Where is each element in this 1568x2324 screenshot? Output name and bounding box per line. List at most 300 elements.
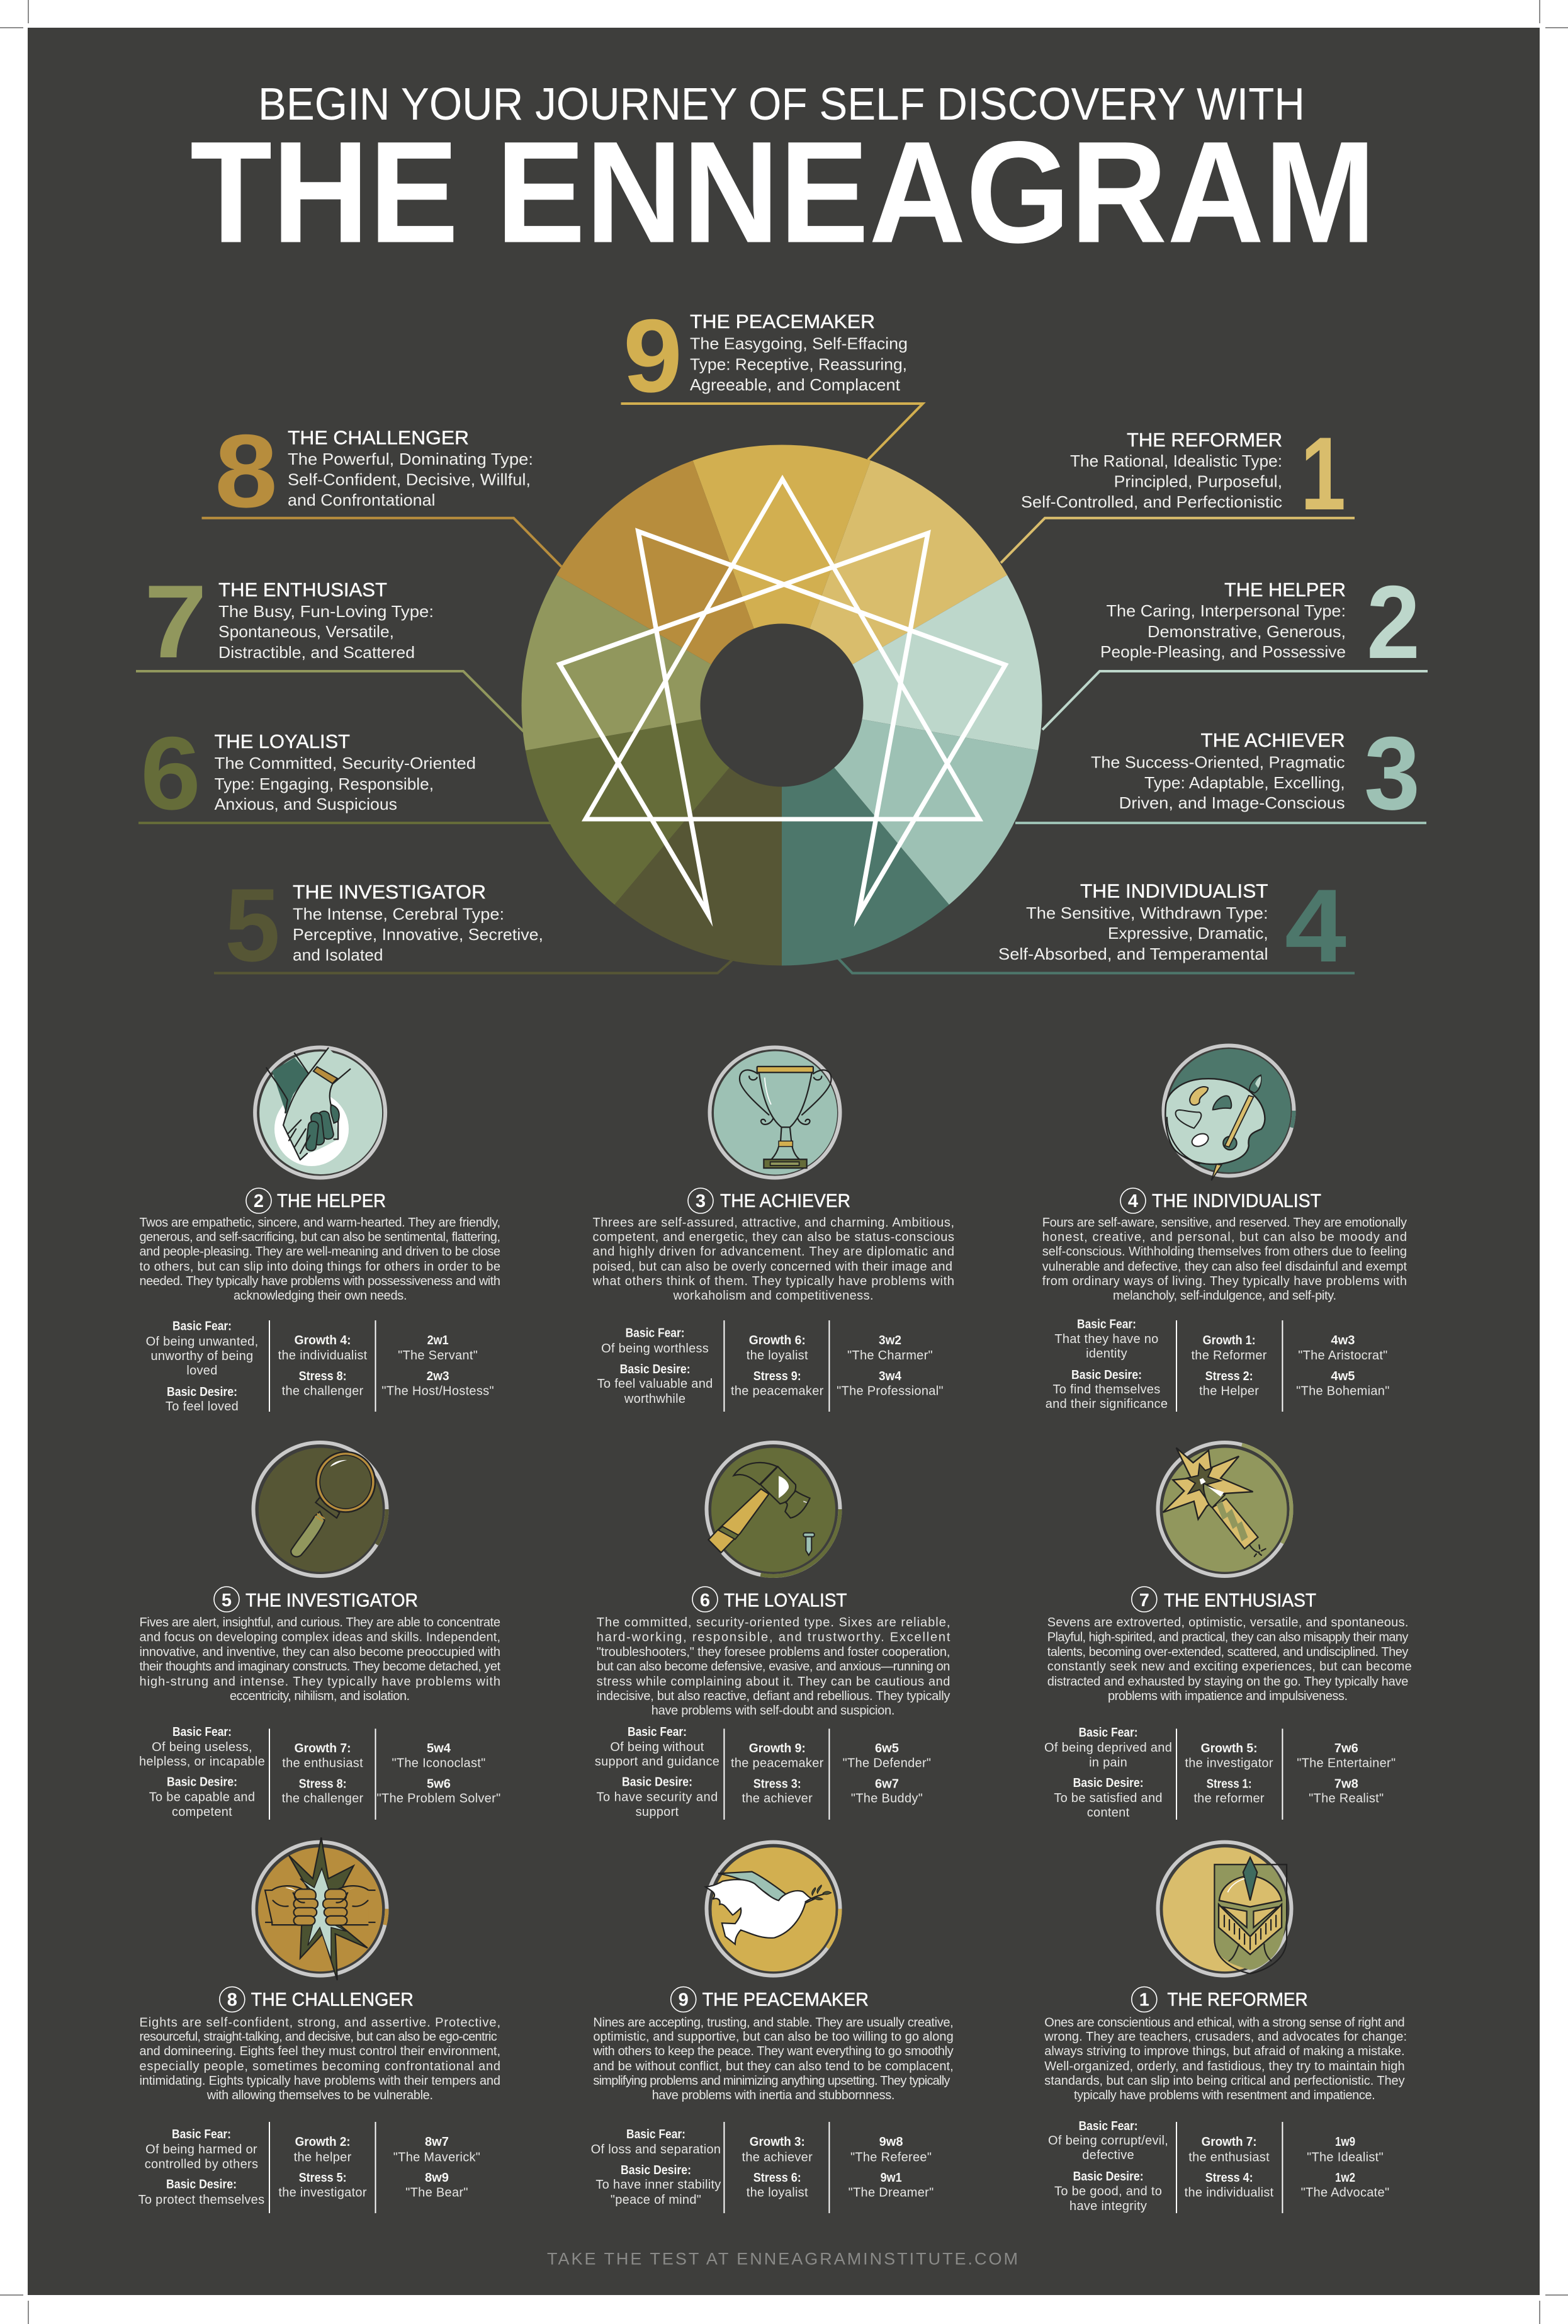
label: type 5: and Isolated [293, 946, 383, 965]
description: stress while complaining about it. They can be cautious and [597, 1675, 950, 1689]
table: fear, desire, growth, stress, wings: Basic Desire: [1073, 1776, 1144, 1790]
table: fear, desire, growth, stress, wings: Of being harmed or [145, 2143, 257, 2157]
table: fear, desire, growth, stress, wings: Basic Desire: [1073, 2170, 1144, 2184]
description: honest, creative, and personal, but can also be moody and [1042, 1230, 1407, 1244]
description: but can also become defensive, evasive, and anxious—running on [597, 1660, 950, 1674]
label: type 3: 3 [1364, 715, 1420, 831]
label: type 1 [1021, 416, 1346, 531]
table: fear, desire, growth, stress, wings: the achiever [742, 2151, 813, 2165]
table: fear, desire, growth, stress, wings: the challenger [282, 1384, 364, 1398]
table: fear, desire, growth, stress, wings: worthwhile [624, 1392, 685, 1406]
table: fear, desire, growth, stress, wings [138, 2122, 480, 2213]
description: and be without conflict, but they can also tend to be complacent, [593, 2060, 954, 2073]
heading: 9 the peacemaker: THE PEACEMAKER [702, 1990, 869, 2010]
label: type 1: THE REFORMER [1127, 429, 1282, 451]
table: fear, desire, growth, stress, wings: "The Host/Hostess" [381, 1384, 494, 1398]
description: optimistic, and supportive, but can also be too willing to go along [593, 2030, 954, 2044]
table: fear, desire, growth, stress, wings: "The Professional" [837, 1384, 944, 1398]
table: fear, desire, growth, stress, wings: the loyalist [747, 2186, 808, 2200]
description [140, 1616, 500, 1703]
description: resourceful, straight-talking, and decisive, but can also be ego-centric [140, 2030, 497, 2044]
table: fear, desire, growth, stress, wings: and their significance [1046, 1397, 1168, 1411]
table: fear, desire, growth, stress, wings: the peacemaker [731, 1757, 824, 1771]
label: type 6: THE LOYALIST [215, 730, 350, 752]
label: type 3: Type: Adaptable, Excelling, [1144, 773, 1345, 792]
table: fear, desire, growth, stress, wings: 4w5 [1331, 1369, 1355, 1383]
label: type 7: 7 [144, 564, 207, 679]
table: fear, desire, growth, stress, wings: Basic Fear: [172, 1725, 232, 1739]
table: fear, desire, growth, stress, wings: the individualist [1185, 2186, 1274, 2200]
table: fear, desire, growth, stress, wings: "The Iconoclast" [392, 1757, 486, 1771]
heading: 6 the loyalist: 6 [700, 1590, 710, 1611]
table: fear, desire, growth, stress, wings: To feel valuable and [597, 1377, 713, 1391]
heading: 1 the reformer [1132, 1987, 1308, 2012]
label: type 8: Self-Confident, Decisive, Willful, [288, 470, 531, 489]
table: fear, desire, growth, stress, wings: the challenger [282, 1792, 364, 1806]
label: type 8: and Confrontational [288, 490, 436, 509]
description: Twos are empathetic, sincere, and warm-hearted. They are friendly, [140, 1216, 500, 1230]
label: type 8: 8 [215, 413, 278, 529]
label: type 3: THE ACHIEVER [1201, 729, 1345, 751]
panel: the helper [140, 1048, 500, 1414]
description: typically have problems with resentment and impatience. [1074, 2089, 1375, 2102]
table: fear, desire, growth, stress, wings [597, 1320, 944, 1412]
table: fear, desire, growth, stress, wings: support [636, 1805, 679, 1819]
table: fear, desire, growth, stress, wings: Growth 5: [1201, 1742, 1258, 1755]
table: fear, desire, growth, stress, wings: "The Charmer" [847, 1349, 933, 1363]
table: fear, desire, growth, stress, wings: the investigator [278, 2186, 367, 2200]
label: type 8 [215, 413, 533, 529]
description: "troubleshooters," they foresee problems and foster cooperation, [597, 1645, 950, 1659]
icon: firework rocket [1158, 1443, 1292, 1576]
table: fear, desire, growth, stress, wings: Stress 8: [299, 1777, 347, 1791]
heading: 6 the loyalist [692, 1587, 847, 1612]
description: and people-pleasing. They are well-meaning and driven to be close [140, 1245, 500, 1259]
table: fear, desire, growth, stress, wings [139, 1725, 500, 1820]
label: type 6: Anxious, and Suspicious [215, 795, 397, 813]
table: fear, desire, growth, stress, wings: "The Defender" [843, 1757, 931, 1771]
title: begin your journey: BEGIN YOUR JOURNEY OF SELF DISCOVERY WITH [258, 79, 1305, 130]
table: fear, desire, growth, stress, wings: That they have no [1054, 1332, 1159, 1346]
panel: the loyalist [595, 1443, 950, 1820]
description: hard-working, responsible, and trustworthy. Excellent [597, 1631, 950, 1645]
table: fear, desire, growth, stress, wings: Basic Fear: [1077, 1317, 1136, 1331]
table: fear, desire, growth, stress, wings: Of being useless, [152, 1740, 252, 1754]
description [140, 1216, 500, 1303]
table: fear, desire, growth, stress, wings: loved [186, 1364, 218, 1378]
label: type 7: Distractible, and Scattered [218, 643, 415, 662]
description: Threes are self-assured, attractive, and charming. Ambitious, [593, 1216, 954, 1230]
label: type 4: 4 [1285, 868, 1346, 983]
table: fear, desire, growth, stress, wings: 2w1 [427, 1334, 449, 1347]
label: type 1: 1 [1300, 416, 1346, 531]
description: vulnerable and defective, they can also feel disdainful and exempt [1042, 1260, 1407, 1274]
label: type 2: Demonstrative, Generous, [1148, 622, 1346, 641]
label: type 2: People-Pleasing, and Possessive [1100, 642, 1346, 661]
table: fear, desire, growth, stress, wings: the achiever [742, 1792, 813, 1806]
heading: 8 the challenger: THE CHALLENGER [251, 1990, 414, 2010]
heading: 4 the individualist: THE INDIVIDUALIST [1152, 1191, 1321, 1211]
table: fear, desire, growth, stress, wings: "The Maverick" [393, 2151, 480, 2165]
label: type 6 [140, 715, 476, 831]
table: fear, desire, growth, stress, wings: 8w9 [425, 2171, 449, 2185]
description: Nines are accepting, trusting, and stable. They are usually creative, [593, 2015, 954, 2029]
description: generous, and self-sacrificing, but can also be sentimental, flattering, [140, 1230, 500, 1244]
description: to others, but can slip into doing things for others in order to be [140, 1260, 500, 1274]
title: the enneagram: THE ENNEAGRAM [190, 111, 1376, 273]
label: type 9: THE PEACEMAKER [690, 310, 875, 332]
label: type 1: Principled, Purposeful, [1114, 472, 1282, 491]
description: problems with impatience and impulsiveness. [1108, 1689, 1348, 1703]
label: type 9: Agreeable, and Complacent [690, 375, 901, 394]
table: fear, desire, growth, stress, wings: Basic Desire: [166, 2177, 237, 2191]
table: fear, desire, growth, stress, wings: the helper [294, 2151, 352, 2165]
description: The committed, security-oriented type. Sixes are reliable, [597, 1616, 950, 1630]
table: fear, desire, growth, stress, wings: To be capable and [149, 1791, 255, 1805]
panel: the reformer [1044, 1842, 1407, 2213]
table: fear, desire, growth, stress, wings: defective [1082, 2148, 1134, 2162]
table: fear, desire, growth, stress, wings: Basic Desire: [620, 1363, 691, 1376]
description [140, 2015, 500, 2102]
description: and highly driven for advancement. They are diplomatic and [593, 1245, 954, 1259]
description: and domineering. Eights feel they must control their environment, [140, 2044, 500, 2058]
label: type 4 [998, 868, 1346, 983]
description [1047, 1616, 1412, 1703]
table: fear, desire, growth, stress, wings: To feel loved [166, 1400, 239, 1414]
table: fear, desire, growth, stress, wings: Basic Desire: [622, 1776, 692, 1789]
label: type 5: Perceptive, Innovative, Secretive, [293, 925, 543, 944]
icon: trophy [710, 1048, 840, 1177]
table: fear, desire, growth, stress, wings: Growth 2: [295, 2135, 351, 2149]
table: fear, desire, growth, stress, wings: competent [172, 1805, 232, 1819]
label: type 3 [1091, 715, 1420, 831]
table: fear, desire, growth, stress, wings: Basic Desire: [621, 2163, 691, 2177]
table: fear, desire, growth, stress, wings: Of loss and separation [591, 2143, 721, 2157]
table: fear, desire, growth, stress, wings: To protect themselves [138, 2193, 264, 2207]
description: eccentricity, nihilism, and isolation. [230, 1689, 410, 1703]
heading: 7 the enthusiast [1132, 1587, 1316, 1612]
table: fear, desire, growth, stress, wings: Basic Fear: [172, 2128, 231, 2141]
description: competent, and energetic, they can also be status-conscious [593, 1230, 954, 1244]
description: have problems with inertia and stubbornness. [652, 2089, 894, 2102]
description: standards, but can slip into being critical and perfectionistic. They [1044, 2074, 1405, 2088]
description: what others think of them. They typically have problems with [592, 1274, 954, 1288]
heading: 4 the individualist [1120, 1188, 1321, 1213]
heading: 5 the investigator: THE INVESTIGATOR [245, 1590, 418, 1611]
label: type 5 [225, 867, 543, 983]
table: fear, desire, growth, stress, wings: Of being worthless [601, 1342, 709, 1356]
table: fear, desire, growth, stress, wings: "The Buddy" [851, 1792, 923, 1806]
table: fear, desire, growth, stress, wings: "The Aristocrat" [1298, 1349, 1388, 1363]
heading: 3 the achiever [688, 1188, 850, 1213]
label: type 6: 6 [140, 715, 201, 831]
table: fear, desire, growth, stress, wings: Basic Desire: [167, 1385, 237, 1399]
label: type 2: The Caring, Interpersonal Type: [1107, 601, 1346, 620]
table: fear, desire, growth, stress, wings [595, 1725, 931, 1820]
table: fear, desire, growth, stress, wings: "The Idealist" [1307, 2151, 1384, 2165]
label: type 5: 5 [225, 867, 280, 983]
table: fear, desire, growth, stress, wings: Growth 3: [750, 2135, 805, 2149]
description: melancholy, self-indulgence, and self-pity. [1113, 1289, 1336, 1303]
icon: hammer and nail [706, 1443, 840, 1576]
heading: 7 the enthusiast: 7 [1139, 1590, 1149, 1611]
description: have problems with self-doubt and suspicion. [651, 1704, 894, 1718]
label: type 1: The Rational, Idealistic Type: [1070, 451, 1282, 470]
label: type 8: THE CHALLENGER [288, 427, 469, 449]
table: fear, desire, growth, stress, wings: Stress 2: [1205, 1369, 1253, 1383]
description [592, 2015, 954, 2102]
table: fear, desire, growth, stress, wings [1048, 2119, 1389, 2213]
description: intimidating. Eights typically have problems with their tempers and [140, 2074, 500, 2088]
table: fear, desire, growth, stress, wings: To have inner stability [595, 2178, 721, 2192]
panel: the investigator [139, 1443, 500, 1820]
table: fear, desire, growth, stress, wings [1044, 1726, 1396, 1820]
table: fear, desire, growth, stress, wings: Growth 1: [1203, 1334, 1256, 1347]
label: type 2: 2 [1367, 564, 1420, 680]
description: acknowledging their own needs. [234, 1289, 407, 1303]
heading: 2 the helper: THE HELPER [277, 1191, 386, 1211]
table: fear, desire, growth, stress, wings: in pain [1089, 1755, 1127, 1769]
table: fear, desire, growth, stress, wings: the Reformer [1191, 1349, 1267, 1363]
description: Well-organized, orderly, and fastidious, they try to maintain high [1044, 2060, 1405, 2073]
table: fear, desire, growth, stress, wings: Stress 6: [753, 2171, 801, 2185]
table: fear, desire, growth, stress, wings: 7w6 [1334, 1742, 1358, 1755]
heading: 8 the challenger: 8 [227, 1990, 237, 2010]
heading: 2 the helper: 2 [254, 1191, 264, 1211]
label: type 2: THE HELPER [1224, 579, 1346, 601]
label: type 9: The Easygoing, Self-Effacing [690, 334, 908, 353]
label: type 5: The Intense, Cerebral Type: [293, 905, 504, 924]
description: from ordinary ways of living. They typically have problems with [1042, 1274, 1407, 1288]
table: fear, desire, growth, stress, wings: "The Entertainer" [1297, 1757, 1396, 1771]
heading: 5 the investigator: 5 [222, 1590, 232, 1611]
heading: 9 the peacemaker: 9 [679, 1990, 689, 2010]
heading: 8 the challenger [220, 1987, 414, 2012]
heading: 7 the enthusiast: THE ENTHUSIAST [1164, 1590, 1316, 1611]
heading: 1 the reformer: THE REFORMER [1167, 1990, 1308, 2010]
table: fear, desire, growth, stress, wings: the enthusiast [282, 1757, 363, 1771]
label: type 1: Self-Controlled, and Perfectionistic [1021, 492, 1282, 511]
table: fear, desire, growth, stress, wings: "The Bear" [405, 2186, 468, 2200]
table: fear, desire, growth, stress, wings: the enthusiast [1188, 2151, 1270, 2165]
table: fear, desire, growth, stress, wings: To have security and [597, 1791, 718, 1805]
label: type 4: Expressive, Dramatic, [1108, 924, 1268, 943]
table: fear, desire, growth, stress, wings: Stress 1: [1207, 1777, 1252, 1791]
label: type 9 [623, 298, 908, 414]
table: fear, desire, growth, stress, wings: support and guidance [595, 1755, 719, 1769]
table: fear, desire, growth, stress, wings: the loyalist [747, 1349, 808, 1363]
description: Playful, high-spirited, and practical, they can also misapply their many [1047, 1631, 1408, 1645]
description: distracted and exhausted by staying on the go. They typically have [1047, 1675, 1408, 1689]
description: constantly seek new and exciting experiences, but can become [1047, 1660, 1412, 1674]
table: fear, desire, growth, stress, wings: the peacemaker [731, 1384, 824, 1398]
description: indecisive, but also reactive, defiant and rebellious. They typically [597, 1689, 950, 1703]
table: fear, desire, growth, stress, wings: Stress 5: [299, 2171, 347, 2185]
description: especially people, sometimes becoming confrontational and [140, 2060, 500, 2073]
table: fear, desire, growth, stress, wings: To find themselves [1052, 1383, 1161, 1397]
table: fear, desire, growth, stress, wings: Of being unwanted, [146, 1335, 258, 1349]
table: fear, desire, growth, stress, wings: the individualist [278, 1349, 368, 1363]
table: fear, desire, growth, stress, wings: Growth 9: [749, 1742, 806, 1755]
icon: clashing fists [253, 1837, 387, 1980]
panel: the individualist [1042, 1045, 1407, 1412]
table: fear, desire, growth, stress, wings: 9w8 [879, 2135, 903, 2149]
table: fear, desire, growth, stress, wings: the Helper [1199, 1384, 1259, 1398]
description: innovative, and inventive, they can also become preoccupied with [140, 1645, 500, 1659]
table: fear, desire, growth, stress, wings: 3w2 [879, 1334, 901, 1347]
description: with others to keep the peace. They want everything to go smoothly [592, 2044, 954, 2058]
table: fear, desire, growth, stress, wings: Stress 9: [753, 1369, 801, 1383]
icon: knight helmet on shield [1158, 1842, 1292, 1976]
table: fear, desire, growth, stress, wings: Basic Desire: [1071, 1368, 1142, 1382]
table: fear, desire, growth, stress, wings: "The Realist" [1309, 1792, 1384, 1806]
description: Fours are self-aware, sensitive, and reserved. They are emotionally [1042, 1216, 1407, 1230]
table: fear, desire, growth, stress, wings: 9w1 [881, 2171, 902, 2185]
icon: dove [706, 1842, 840, 1976]
table: fear, desire, growth, stress, wings: "The Servant" [398, 1349, 478, 1363]
table: fear, desire, growth, stress, wings: 2w3 [427, 1369, 449, 1383]
label: type 3: The Success-Oriented, Pragmatic [1091, 753, 1345, 772]
label: type 2 [1100, 564, 1420, 680]
table: fear, desire, growth, stress, wings: Basic Desire: [167, 1776, 237, 1789]
label: type 9: Type: Receptive, Reassuring, [690, 355, 907, 374]
description: wrong. They are teachers, crusaders, and advocates for change: [1044, 2030, 1407, 2044]
table: fear, desire, growth, stress, wings: the reformer [1193, 1792, 1265, 1806]
table: fear, desire, growth, stress, wings: 7w8 [1334, 1777, 1358, 1791]
heading: 4 the individualist: 4 [1128, 1191, 1138, 1211]
table: fear, desire, growth, stress, wings: 3w4 [879, 1369, 902, 1383]
label: type 4: THE INDIVIDUALIST [1080, 880, 1268, 902]
table: fear, desire, growth, stress, wings: Of being without [610, 1740, 704, 1754]
label: type 9: 9 [623, 298, 682, 414]
icon: paint palette [1163, 1045, 1294, 1181]
description: simplifying problems and minimizing anything upsetting. They typically [593, 2074, 950, 2088]
table: fear, desire, growth, stress, wings: Of being corrupt/evil, [1048, 2134, 1168, 2148]
table: fear, desire, growth, stress, wings: 1w9 [1335, 2135, 1355, 2149]
panel: the enthusiast [1044, 1443, 1412, 1820]
label: type 6: Type: Engaging, Responsible, [215, 774, 434, 793]
label: type 7: The Busy, Fun-Loving Type: [218, 602, 434, 621]
table: fear, desire, growth, stress, wings: Stress 8: [299, 1369, 347, 1383]
table: fear, desire, growth, stress, wings: 6w7 [875, 1777, 899, 1791]
description: Sevens are extroverted, optimistic, versatile, and spontaneous. [1047, 1616, 1408, 1630]
table: fear, desire, growth, stress, wings: "The Bohemian" [1296, 1384, 1390, 1398]
table: fear, desire, growth, stress, wings: 1w2 [1335, 2171, 1355, 2185]
icon: magnifying glass [253, 1443, 386, 1576]
table: fear, desire, growth, stress, wings: "The Advocate" [1301, 2186, 1389, 2200]
table: fear, desire, growth, stress, wings: Basic Fear: [172, 1320, 232, 1334]
heading: 3 the achiever: 3 [696, 1191, 706, 1211]
table: fear, desire, growth, stress, wings: Of being deprived and [1044, 1741, 1172, 1755]
table: fear, desire, growth, stress, wings: Basic Fear: [626, 2128, 685, 2141]
description: with allowing themselves to be vulnerable. [206, 2089, 433, 2102]
table: fear, desire, growth, stress, wings: To be satisfied and [1054, 1791, 1163, 1805]
label: type 5: THE INVESTIGATOR [293, 881, 486, 903]
description: Eights are self-confident, strong, and assertive. Protective, [140, 2015, 500, 2029]
table: fear, desire, growth, stress, wings: 6w5 [875, 1742, 899, 1755]
leader lines [136, 404, 1428, 973]
table: fear, desire, growth, stress, wings: the investigator [1185, 1757, 1273, 1771]
table: fear, desire, growth, stress, wings: 5w4 [427, 1742, 451, 1755]
table: fear, desire, growth, stress, wings: 4w3 [1331, 1334, 1355, 1347]
table: fear, desire, growth, stress, wings: "The Dreamer" [849, 2186, 934, 2200]
table: fear, desire, growth, stress, wings: Basic Fear: [1079, 2119, 1138, 2133]
panel: the peacemaker [591, 1842, 954, 2213]
table: fear, desire, growth, stress, wings: Stress 3: [753, 1777, 801, 1791]
table: fear, desire, growth, stress, wings: Basic Fear: [1079, 1726, 1138, 1740]
description: always striving to improve things, but afraid of making a mistake. [1044, 2044, 1405, 2058]
table: fear, desire, growth, stress, wings: 5w6 [427, 1777, 451, 1791]
table: fear, desire, growth, stress, wings: Growth 4: [295, 1334, 351, 1347]
label: type 3: Driven, and Image-Conscious [1119, 793, 1345, 812]
table: fear, desire, growth, stress, wings: Growth 6: [749, 1334, 806, 1347]
icon: holding hands [255, 1048, 385, 1177]
table: fear, desire, growth, stress, wings: 8w7 [425, 2135, 449, 2149]
label: type 4: The Sensitive, Withdrawn Type: [1026, 904, 1268, 922]
table: fear, desire, growth, stress, wings: Basic Fear: [626, 1327, 685, 1341]
description: high-strung and intense. They typically have problems with [140, 1675, 500, 1689]
table: fear, desire, growth, stress, wings: helpless, or incapable [139, 1755, 265, 1769]
table: fear, desire, growth, stress, wings [146, 1320, 494, 1414]
table: fear, desire, growth, stress, wings [1046, 1317, 1390, 1412]
table: fear, desire, growth, stress, wings: controlled by others [145, 2158, 258, 2172]
description: talents, becoming over-extended, scattered, and undisciplined. They [1047, 1645, 1408, 1659]
label: type 7: THE ENTHUSIAST [218, 579, 387, 601]
description: poised, but can also be overly concerned with their image and [593, 1260, 952, 1274]
heading: 3 the achiever: THE ACHIEVER [720, 1191, 850, 1211]
label: type 7 [144, 564, 434, 679]
table: fear, desire, growth, stress, wings [591, 2122, 934, 2213]
description: workaholism and competitiveness. [673, 1289, 874, 1303]
heading: 5 the investigator [214, 1587, 418, 1612]
label: type 6: The Committed, Security-Oriented [215, 754, 476, 773]
label: type 4: Self-Absorbed, and Temperamental [998, 944, 1268, 963]
heading: 2 the helper [246, 1188, 386, 1213]
table: fear, desire, growth, stress, wings: Basic Fear: [628, 1725, 687, 1739]
description [1044, 2015, 1407, 2102]
table: fear, desire, growth, stress, wings: Stress 4: [1205, 2171, 1253, 2185]
panel: the achiever [592, 1048, 954, 1412]
heading: 1 the reformer: 1 [1139, 1990, 1149, 2010]
chart: enneagram wheel [522, 445, 1042, 966]
table: fear, desire, growth, stress, wings: identity [1086, 1347, 1127, 1361]
description: needed. They typically have problems with possessiveness and with [140, 1274, 500, 1288]
table: fear, desire, growth, stress, wings: "peace of mind" [611, 2193, 701, 2207]
table: fear, desire, growth, stress, wings: have integrity [1069, 2199, 1147, 2213]
description [597, 1616, 950, 1718]
description: Ones are conscientious and ethical, with a strong sense of right and [1044, 2015, 1405, 2029]
table: fear, desire, growth, stress, wings: Growth 7: [1202, 2135, 1257, 2149]
heading: 6 the loyalist: THE LOYALIST [724, 1590, 847, 1611]
heading: 9 the peacemaker [671, 1987, 869, 2012]
description: self-conscious. Withholding themselves from others due to feeling [1042, 1245, 1407, 1259]
table: fear, desire, growth, stress, wings: content [1087, 1806, 1130, 1820]
table: fear, desire, growth, stress, wings: "The Problem Solver" [377, 1792, 500, 1806]
table: fear, desire, growth, stress, wings: unworthy of being [151, 1349, 253, 1363]
table: fear, desire, growth, stress, wings: Growth 7: [295, 1742, 351, 1755]
table: fear, desire, growth, stress, wings: To be good, and to [1054, 2185, 1162, 2199]
label: type 8: The Powerful, Dominating Type: [288, 450, 533, 468]
footer: call to action: TAKE THE TEST AT ENNEAGRAMINSTITUTE.COM [547, 2249, 1018, 2268]
description: and focus on developing complex ideas and skills. Independent, [140, 1631, 500, 1645]
panel: the challenger [138, 1837, 500, 2213]
description [1042, 1216, 1407, 1303]
description [592, 1216, 954, 1303]
description: their thoughts and imaginary constructs. They become detached, yet [140, 1660, 500, 1674]
table: fear, desire, growth, stress, wings: "The Referee" [850, 2151, 932, 2165]
description: Fives are alert, insightful, and curious. They are able to concentrate [140, 1616, 500, 1630]
label: type 7: Spontaneous, Versatile, [218, 622, 394, 641]
